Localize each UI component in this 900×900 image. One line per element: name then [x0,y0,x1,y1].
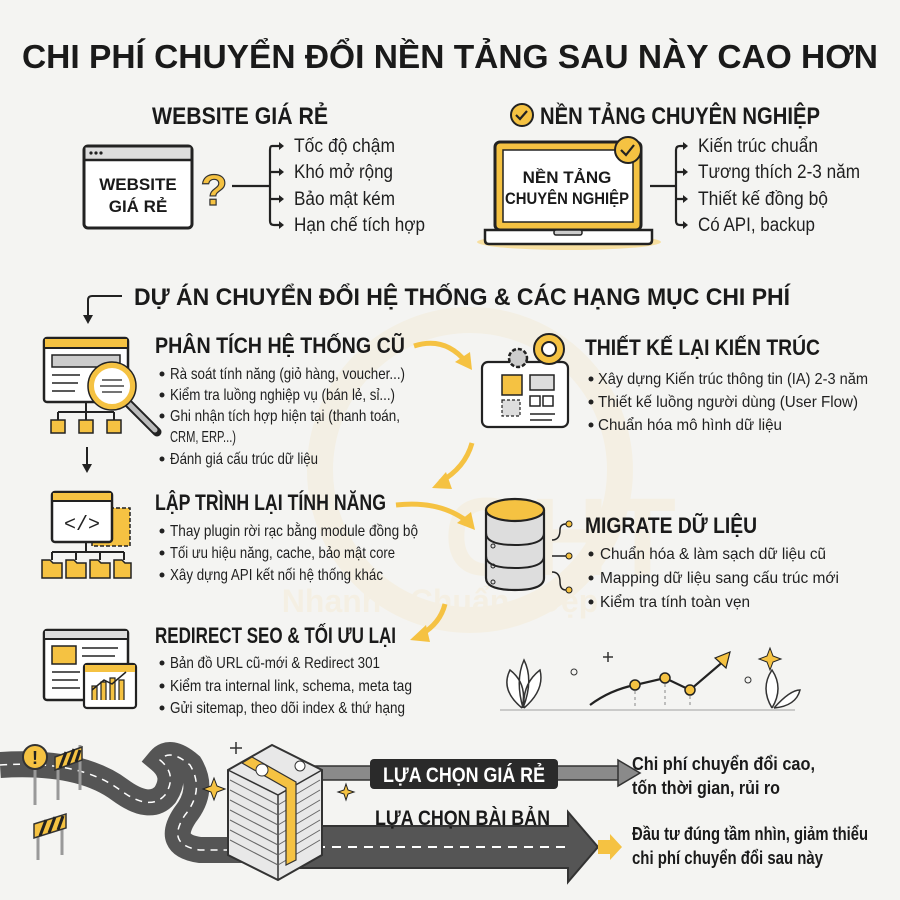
arrow: cheap choice: LỰA CHỌN GIÁ RẺ [383,764,545,787]
panel: analysis: Ghi nhận tích hợp hiện tại (thanh toán, [170,408,400,425]
icon: check circle [511,104,533,126]
panel: SEO: Kiểm tra internal link, schema, meta tag [170,677,412,695]
section heading: DỰ ÁN CHUYỂN ĐỔI HỆ THỐNG & CÁC HẠNG MỤC CHI PHÍ [134,283,791,311]
panel: analysis: Rà soát tính năng (giỏ hàng, voucher...) [170,366,405,383]
section heading [83,283,791,324]
list: platform benefits: Thiết kế đồng bộ [698,189,828,210]
panel: migrate: Mapping dữ liệu sang cấu trúc mới [600,570,839,587]
icon: question mark: ? [201,166,227,215]
panel: SEO: Bản đồ URL cũ-mới & Redirect 301 [170,655,380,672]
watermark: GHT [444,476,676,599]
arrow: cheap choice [300,759,640,789]
arrow: proper choice [290,807,622,882]
list: cheap website issues: Khó mở rộng [294,162,393,183]
text: cheap outcome: Chi phí chuyển đổi cao, [632,754,815,774]
icon: barriers and warning: ! [32,748,38,768]
panel: coding: LẬP TRÌNH LẠI TÍNH NĂNG [155,490,386,515]
panel: architecture: Xây dựng Kiến trúc thông tin (IA) 2-3 năm [598,371,868,388]
list: platform benefits: Tương thích 2-3 năm [698,162,860,183]
panel: analysis: PHÂN TÍCH HỆ THỐNG CŨ [155,332,405,358]
text: proper outcome [632,824,868,868]
panel: coding: Thay plugin rời rạc bằng module đồng bộ [170,521,418,540]
icon: money stack [228,745,322,880]
icon: laptop: CHUYÊN NGHIỆP [505,189,629,208]
arrow: proper choice: LỰA CHỌN BÀI BẢN [375,807,550,830]
bracket connector [650,146,684,225]
sparkles [203,778,354,800]
list: cheap website issues: Hạn chế tích hợp [294,215,425,236]
list: cheap website issues: Bảo mật kém [294,189,395,210]
text: proper outcome: chi phí chuyển đổi sau này [632,848,823,868]
panel: architecture [585,335,868,434]
arrow: analysis to architecture [414,343,466,362]
watermark: Nhanh - Chuẩn - Đẹp [282,583,598,619]
icon: browser window [84,146,192,228]
bottom: roads and choices [0,742,868,882]
panel: SEO [155,622,412,717]
icon: barriers and warning [23,745,82,860]
arrow: coding to migrate [396,504,468,522]
icon: blueprint with gears [482,334,568,427]
panel: migrate [585,513,839,611]
list: cheap website issues [294,136,425,236]
title: CHI PHÍ CHUYỂN ĐỔI NỀN TẢNG SAU NÀY CAO HƠN [22,38,878,75]
panel: coding: Xây dựng API kết nối hệ thống khác [170,567,383,584]
panel: analysis: Kiểm tra luồng nghiệp vụ (bán lẻ, sỉ...) [170,386,395,404]
panel: migrate: Kiểm tra tính toàn vẹn [600,593,750,611]
bracket connector [232,146,280,225]
icon: SEO windows with chart [44,630,136,708]
icon: browser window: WEBSITE [99,175,177,194]
panel: migrate: Chuẩn hóa & làm sạch dữ liệu cũ [600,545,826,563]
icon: analysis browser with magnifier [44,338,157,433]
text: cheap outcome: tốn thời gian, rủi ro [632,778,780,798]
road: winding [0,755,300,850]
icon: code window [42,492,131,578]
list: platform benefits [698,136,860,236]
watermark [282,320,676,620]
list: cheap website issues: Tốc độ chậm [294,136,395,157]
panel: analysis: CRM, ERP...) [170,429,236,446]
icon: laptop: NỀN TẢNG [523,168,611,187]
list: platform benefits: Có API, backup [698,215,815,236]
panel: professional platform [477,101,860,250]
decorative growth chart [500,648,800,710]
icon: laptop [477,137,661,250]
panel: SEO: REDIRECT SEO & TỐI ƯU LẠI [155,622,396,648]
arrow: down [82,447,92,473]
text: cheap outcome [632,754,815,798]
panel: migrate: MIGRATE DỮ LIỆU [585,513,757,538]
panel: coding: Tối ưu hiệu năng, cache, bảo mật core [170,545,395,562]
panel: coding [155,490,418,584]
panel: SEO: Gửi sitemap, theo dõi index & thứ hạng [170,700,405,717]
heading: nền tảng chuyên nghiệp: NỀN TẢNG CHUYÊN NGHIỆP [540,101,820,130]
arrow: migrate to SEO [420,604,445,635]
icon: code window: </> [64,514,100,537]
icon: browser window: GIÁ RẺ [109,197,167,216]
arrow: architecture to coding [440,443,472,482]
panel: architecture: Thiết kế luồng người dùng (User Flow) [598,394,858,411]
list: platform benefits: Kiến trúc chuẩn [698,136,818,157]
panel: cheap website [84,101,425,236]
panel: architecture: THIẾT KẾ LẠI KIẾN TRÚC [585,335,820,360]
panel: analysis: Đánh giá cấu trúc dữ liệu [170,451,318,468]
icon: database [486,499,572,593]
panel: architecture: Chuẩn hóa mô hình dữ liệu [598,416,782,434]
heading: website giá rẻ: WEBSITE GIÁ RẺ [152,101,328,130]
panel: analysis [155,332,405,468]
